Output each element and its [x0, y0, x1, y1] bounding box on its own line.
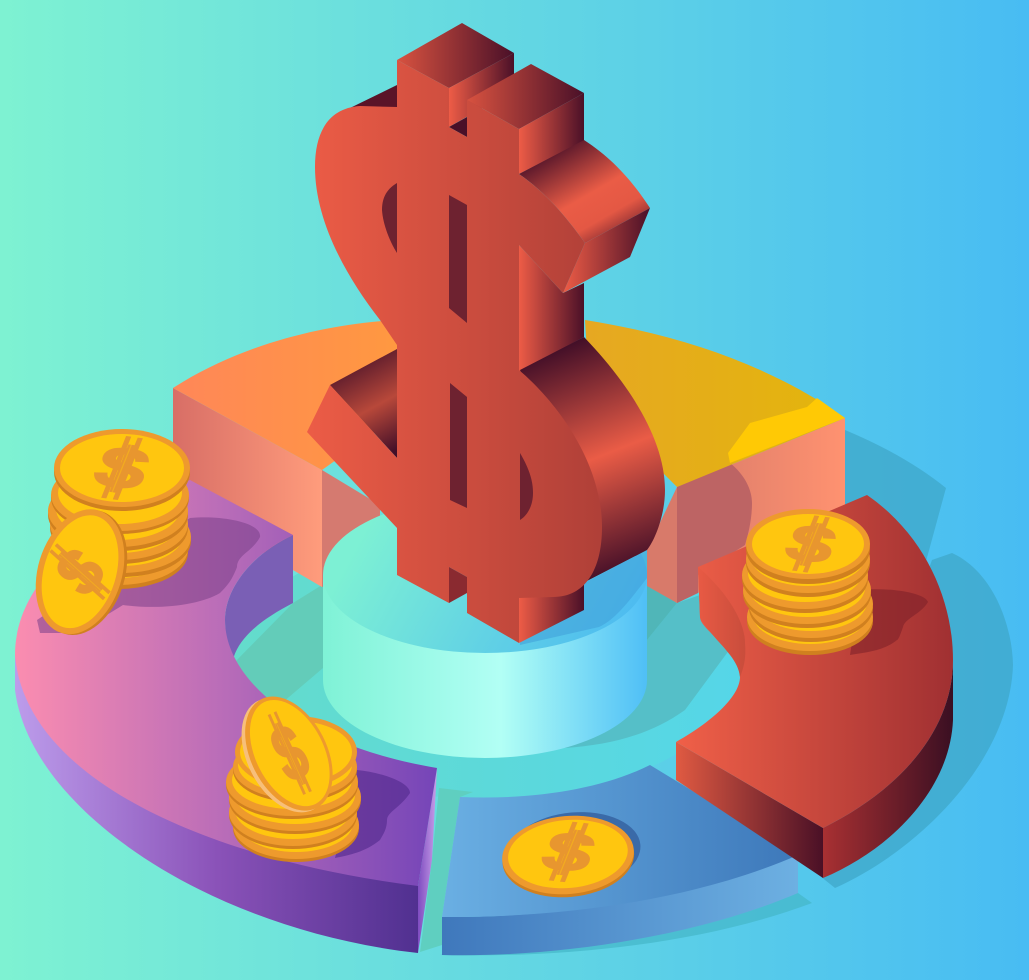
- orange segment: [173, 320, 420, 587]
- coin symbol: $: [40, 533, 119, 610]
- shadows on ground: [800, 430, 1013, 888]
- dollar sign: [307, 23, 665, 643]
- leaning coin left: [21, 498, 142, 646]
- coin stack: bottom: [226, 716, 361, 862]
- floor shadow behind yellow: [647, 585, 677, 640]
- coin symbol: $: [84, 433, 160, 503]
- shadow in gap between purple and blue: [420, 788, 473, 952]
- right bar side: [519, 245, 584, 372]
- single coin on blue: [499, 807, 644, 903]
- back edge: [350, 85, 397, 110]
- curl top and end: [519, 140, 650, 243]
- inner wall of red: [698, 567, 745, 677]
- central cylinder: [323, 497, 647, 758]
- floor shadow right: [565, 595, 745, 748]
- blue segment: [442, 765, 798, 955]
- purple segment: [15, 480, 437, 953]
- inner floor ring: [229, 531, 741, 799]
- dollar shadow on cylinder: [519, 550, 647, 645]
- coin symbol: $: [532, 819, 605, 885]
- leaning coin bottom: [224, 682, 350, 827]
- cut-outs: [382, 183, 533, 520]
- shadow under stack: [37, 517, 260, 633]
- inner lower face: [330, 349, 397, 458]
- lower bowl side: [520, 337, 665, 582]
- red segment: [676, 495, 953, 878]
- shadow under lower stack: [335, 770, 410, 858]
- coin stack: upper left: [48, 429, 191, 589]
- coin stack: right: [742, 509, 873, 655]
- coin symbol: $: [776, 513, 845, 576]
- top left block: [397, 23, 514, 88]
- front face: [307, 60, 602, 643]
- shadow under blue segment: [440, 893, 812, 955]
- floor shadow left: [232, 580, 330, 720]
- coin symbol: $: [259, 707, 321, 800]
- second block: [467, 64, 584, 129]
- yellow segment: [585, 320, 845, 603]
- shadow on red: [850, 589, 928, 655]
